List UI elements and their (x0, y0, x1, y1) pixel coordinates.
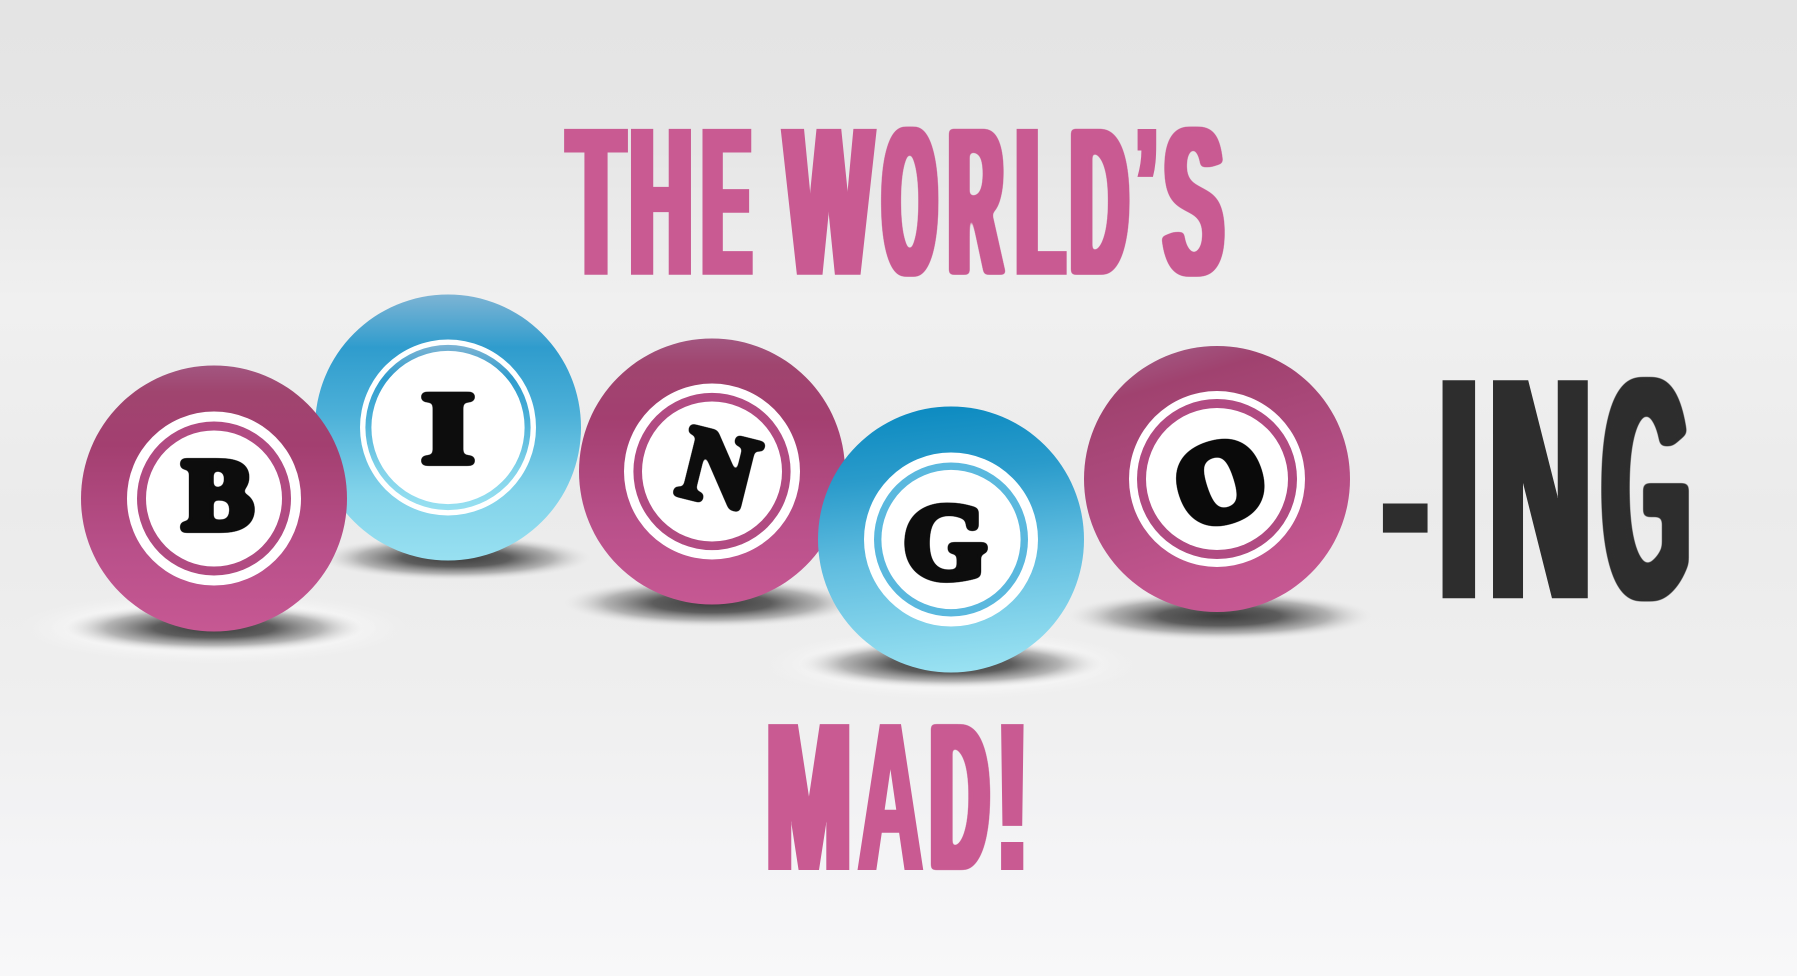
bingo ball: N (579, 338, 845, 604)
heading: THE WORLD'S: T (568, 82, 624, 320)
ball shadows (19, 536, 1372, 700)
heading: THE WORLD'S (568, 82, 1223, 321)
heading: -ING: I (1439, 312, 1479, 667)
heading: THE WORLD'S: E (703, 83, 750, 320)
letter B: B (182, 438, 254, 551)
letter I: I (421, 372, 475, 485)
bingo ball: I (315, 294, 581, 560)
heading: -ING: N (1490, 311, 1591, 666)
heading: -ING (1384, 311, 1690, 667)
heading: THE WORLD'S: W (786, 82, 872, 320)
heading: THE WORLD'S: ’ (1138, 94, 1155, 283)
heading: -ING: - (1384, 361, 1427, 634)
heading: MAD!: M (766, 680, 851, 916)
bingo ball: B (81, 366, 347, 632)
bingo ball: O (1084, 346, 1350, 612)
heading: THE WORLD'S: S (1164, 84, 1223, 320)
letter G: G (903, 483, 987, 602)
heading: THE WORLD'S: O (883, 83, 936, 320)
heading: THE WORLD'S: L (1016, 82, 1064, 320)
letter N: N (669, 404, 769, 533)
heading: MAD! (766, 678, 1027, 916)
heading: MAD!: D (931, 678, 988, 915)
heading: THE WORLD'S: D (1071, 83, 1128, 320)
heading: MAD!: A (858, 680, 923, 916)
letter O: O (1160, 410, 1280, 553)
heading: -ING: G (1603, 313, 1690, 666)
heading: MAD!: ! (998, 679, 1027, 916)
heading: THE WORLD'S: R (949, 82, 1003, 320)
heading: THE WORLD'S: H (630, 84, 692, 321)
bingo ball: G (818, 406, 1084, 672)
